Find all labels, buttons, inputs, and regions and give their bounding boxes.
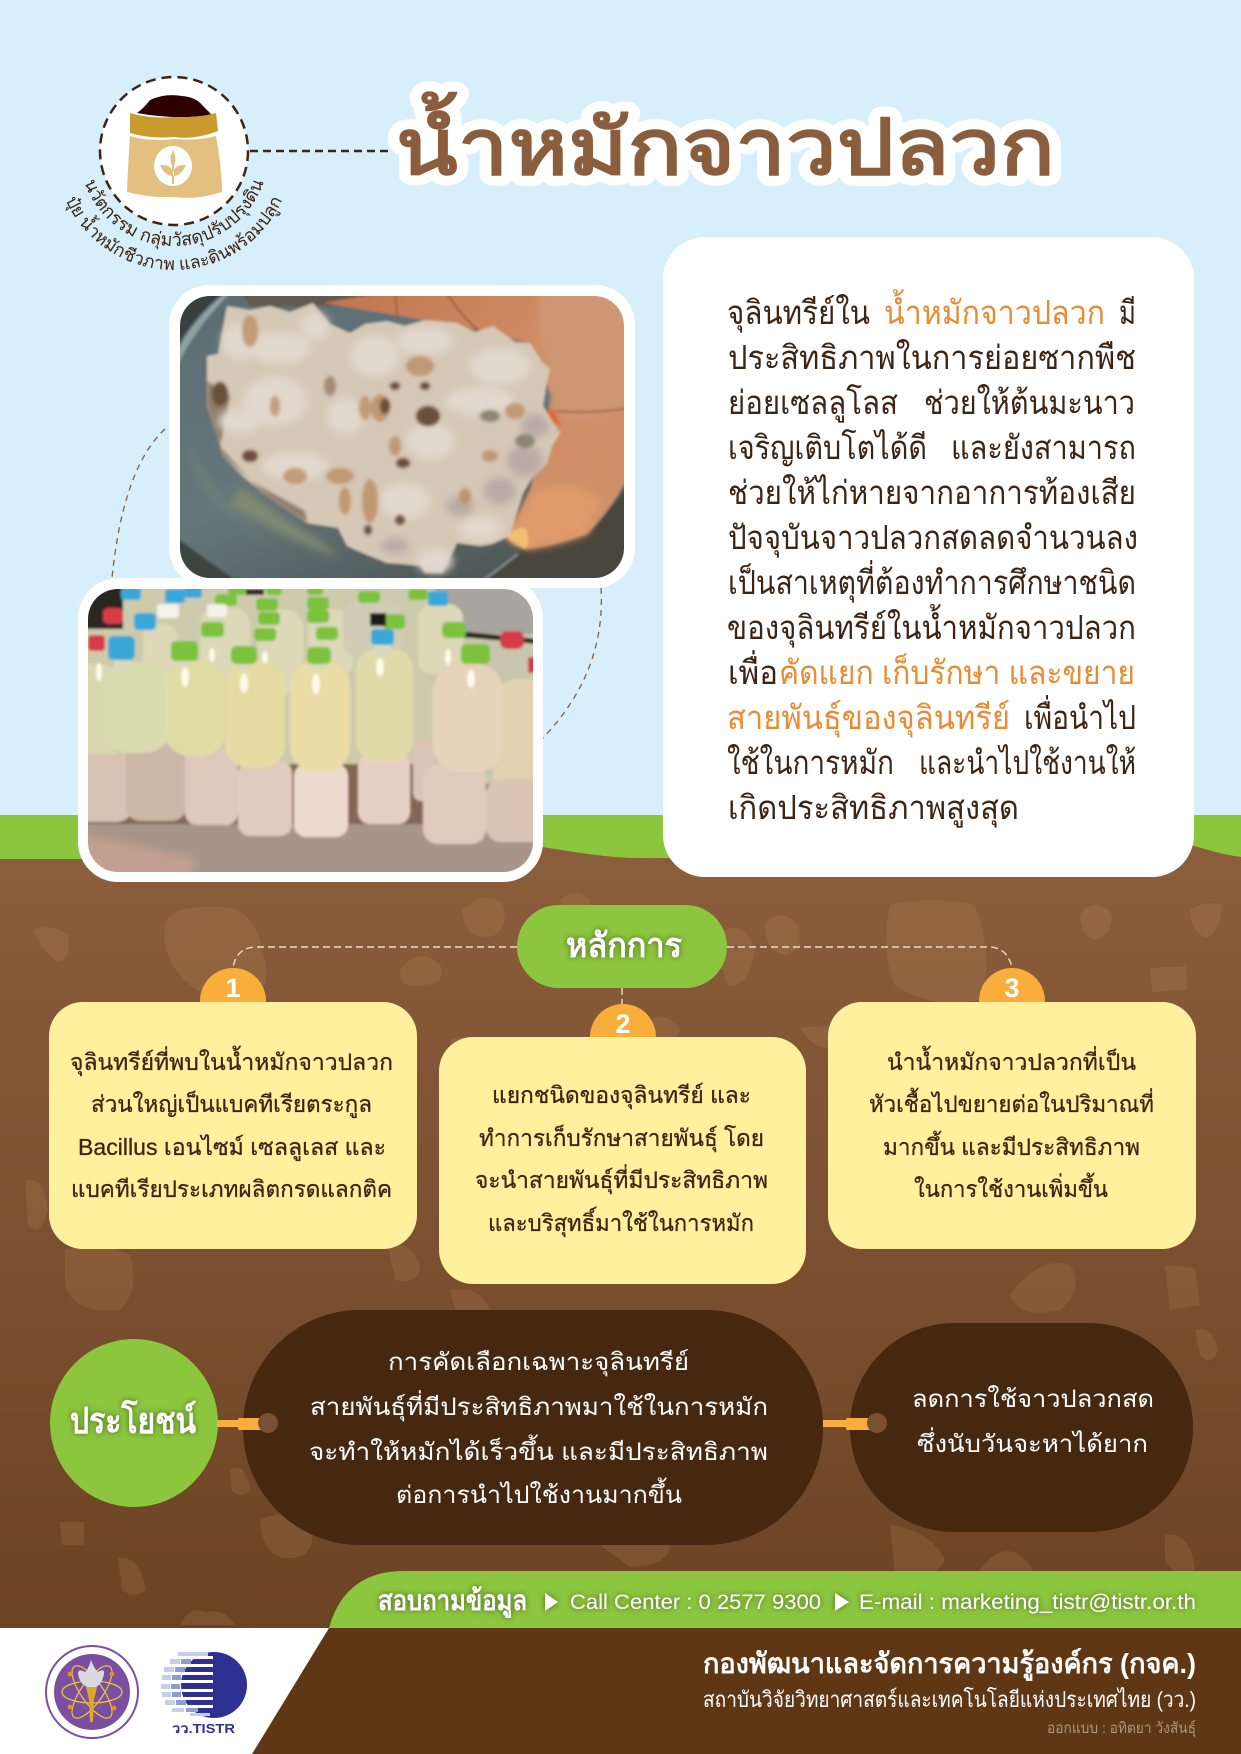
soil ground with blobs xyxy=(0,840,1241,1754)
badge 3: 3 xyxy=(1004,973,1020,1003)
panel: description card: เป็นสาเหตุที่ต้องทำการศึกษาชนิด xyxy=(728,560,1136,603)
card 1: จุลินทรีย์ที่พบในน้ำหมักจาวปลวก xyxy=(70,1046,393,1076)
icon: plant sprout xyxy=(160,150,186,184)
card 3 xyxy=(828,968,1196,1249)
panel: description card: เพื่อ xyxy=(728,650,778,691)
icon: bag neck xyxy=(130,113,218,138)
logo: TISTR: วว.TISTR xyxy=(172,1721,236,1736)
contact bar xyxy=(329,1571,1241,1628)
curved caption under badge: นวัตกรรม กลุ่มวัสดุปรับปรุงดิน xyxy=(85,180,264,250)
footer brown panel xyxy=(252,1628,1241,1754)
contact bar: E-mail : marketing_tistr@tistr.or.th xyxy=(859,1591,1196,1614)
benefit pill 2: ลดการใช้จาวปลวกสด xyxy=(912,1385,1154,1413)
panel: description card: เกิดประสิทธิภาพสูงสุด xyxy=(728,789,1019,828)
curved caption under badge: ปุ๋ย น้ำหมักชีวภาพ และดินพร้อมปลูก xyxy=(65,196,282,270)
panel: description card: จุลินทรีย์ใน xyxy=(727,294,870,333)
benefit pill 1: จะทำให้หมักได้เร็วขึ้น และมีประสิทธิภาพ xyxy=(309,1434,768,1466)
crust xyxy=(207,303,560,573)
card 2: และบริสุทธิ์มาใช้ในการหมัก xyxy=(488,1206,754,1237)
card 3: นำน้ำหมักจาวปลวกที่เป็น xyxy=(887,1046,1136,1075)
card 3: มากขึ้น และมีประสิทธิภาพ xyxy=(883,1131,1140,1160)
badge 2 xyxy=(590,1004,656,1070)
panel: description card: เจริญเติบโตได้ดี xyxy=(728,429,927,466)
panel: description card: คัดแยก เก็บรักษา และขยาย xyxy=(779,653,1135,691)
benefit pill 1: การคัดเลือกเฉพาะจุลินทรีย์ xyxy=(388,1348,689,1377)
back row bottle shoulders xyxy=(143,599,463,694)
connector icon 2 xyxy=(823,1413,887,1433)
title: น้ำหมักจาวปลวก xyxy=(396,91,1055,191)
connectors from principle pill xyxy=(233,947,1012,1006)
benefits heading circle: ประโยชน์ xyxy=(70,1399,196,1441)
contact bar: สอบถามข้อมูล xyxy=(378,1585,527,1618)
back-right bottle behind B6 xyxy=(413,739,435,801)
icon: soil pile xyxy=(137,95,212,117)
benefit pill 1: ต่อการนำไปใช้งานมากขึ้น xyxy=(396,1477,682,1509)
badge 1 xyxy=(200,968,266,1034)
card 1 xyxy=(49,968,417,1249)
footer organization text: กองพัฒนาและจัดการความรู้องค์กร (กจค.) xyxy=(703,1648,1196,1681)
card 2 xyxy=(439,1004,806,1284)
panel: description card: มี xyxy=(1119,294,1136,331)
photo: fermenting bottles xyxy=(68,578,563,882)
connector icon 1 xyxy=(217,1413,278,1433)
panel: description card xyxy=(663,237,1194,877)
card 3: หัวเชื้อไปขยายต่อในปริมาณที่ xyxy=(869,1088,1154,1117)
heading pill: principle: หลักการ xyxy=(566,927,683,965)
badge 1: 1 xyxy=(225,973,241,1003)
icon: bag body xyxy=(127,136,222,198)
benefit pill 1: สายพันธุ์ที่มีประสิทธิภาพมาใช้ในการหมัก xyxy=(310,1390,768,1422)
card 1: ส่วนใหญ่เป็นแบคทีเรียตระกูล xyxy=(91,1089,372,1118)
far-left bottle xyxy=(88,664,116,754)
card 3: ในการใช้งานเพิ่มขึ้น xyxy=(914,1173,1108,1202)
photo: termite fungus comb in hand xyxy=(169,285,635,588)
contact bar: Call Center : 0 2577 9300 xyxy=(570,1591,821,1614)
front upper liquid bodies xyxy=(114,662,166,754)
green grass band xyxy=(0,815,1241,875)
card 2: ทำการเก็บรักษาสายพันธุ์ โดย xyxy=(479,1123,764,1152)
panel: description card: ช่วยให้ต้นมะนาว xyxy=(924,384,1135,421)
dashed arc between photos xyxy=(112,429,601,738)
bottle necks xyxy=(114,643,390,669)
panel: description card: สายพันธุ์ของจุลินทรีย์ xyxy=(727,699,1010,738)
panel: description card: ใช้ในการหมัก xyxy=(727,744,894,781)
panel: description card: ของจุลินทรีย์ในน้ำหมักจาวปลวก xyxy=(727,604,1136,648)
front lower bottle sections xyxy=(126,744,486,844)
card 1: Bacillus เอนไซม์ เซลลูเลส และ xyxy=(78,1134,386,1161)
logo: ministry seal xyxy=(46,1646,138,1738)
far-right bottle xyxy=(492,678,533,780)
card 2: จะนำสายพันธุ์ที่มีประสิทธิภาพ xyxy=(475,1164,768,1194)
panel: description card: ปัจจุบันจาวปลวกสดลดจำนวนลง xyxy=(728,519,1138,558)
footer organization text: ออกแบบ : อทิตยา วังสันธุ์ xyxy=(1047,1720,1196,1738)
footer organization text xyxy=(703,1648,1196,1738)
panel: description card: และยังสามารถ xyxy=(951,429,1136,466)
heading pill: principle xyxy=(517,905,727,988)
logo: TISTR xyxy=(161,1652,247,1736)
badge 3 xyxy=(979,968,1045,1034)
panel: description card: ประสิทธิภาพในการย่อยซากพืช xyxy=(728,339,1136,376)
panel: description card: และนำไปใช้งานให้ xyxy=(919,744,1136,781)
panel: description card: น้ำหมักจาวปลวก xyxy=(884,289,1105,331)
card 2: แยกชนิดของจุลินทรีย์ และ xyxy=(492,1082,751,1109)
benefit pill 2 xyxy=(850,1323,1193,1532)
panel: description card: เพื่อนำไป xyxy=(1024,695,1136,736)
panel: description card: ย่อยเซลลูโลส xyxy=(728,384,898,423)
footer white logo area xyxy=(0,1628,340,1754)
logo badge: fertilizer bag with dashed circle xyxy=(100,77,248,225)
benefit pill 2: ซึ่งนับวันจะหาได้ยาก xyxy=(917,1427,1148,1458)
badge 2: 2 xyxy=(615,1009,631,1039)
hand xyxy=(323,291,629,549)
benefit pill 1 xyxy=(243,1310,823,1545)
connector dashed line to title xyxy=(250,150,388,152)
benefits heading circle xyxy=(50,1339,218,1507)
card 1: แบคทีเรียประเภทผลิตกรดแลกติค xyxy=(71,1176,392,1202)
panel: description card: ช่วยให้ไก่หายจากอาการท้องเสีย xyxy=(728,474,1136,511)
caps xyxy=(171,586,490,664)
